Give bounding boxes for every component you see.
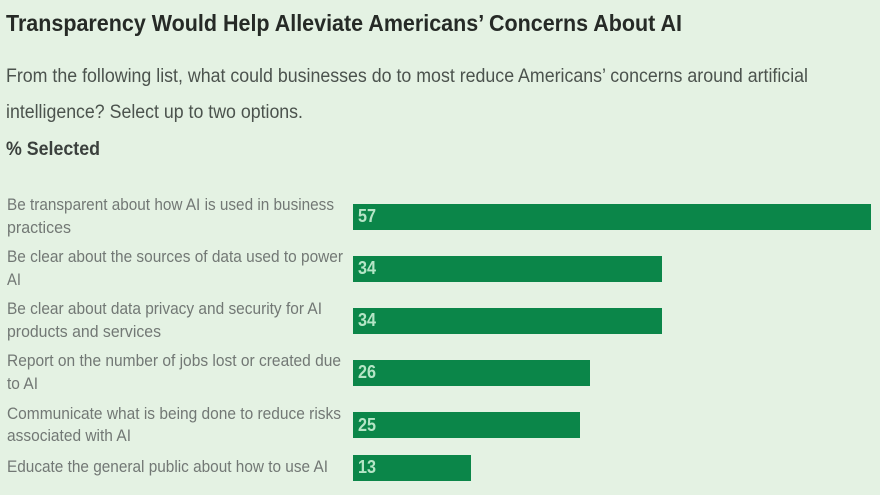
unit label: % Selected — [6, 139, 100, 160]
question text: From the following list, what could businesses do to most reduce Americans’ concerns around artificial — [6, 66, 808, 87]
row: educate public — [7, 455, 471, 481]
row: sources of data: Be clear about the sources of data used to power — [7, 247, 343, 266]
row: jobs lost or created: Report on the number of jobs lost or created due — [7, 351, 341, 370]
row: reduce risks: associated with AI — [7, 426, 131, 445]
row: sources of data — [7, 247, 662, 289]
question text: intelligence? Select up to two options. — [6, 102, 303, 123]
row: jobs lost or created — [7, 351, 590, 393]
row: privacy and security: Be clear about data privacy and security for AI — [7, 299, 322, 318]
row: reduce risks — [7, 404, 580, 445]
row: reduce risks: Communicate what is being done to reduce risks — [7, 404, 341, 423]
row: be transparent — [7, 195, 871, 237]
row: privacy and security: 34 — [358, 310, 376, 330]
bar chart — [7, 195, 871, 481]
row: jobs lost or created: to AI — [7, 374, 38, 393]
row: privacy and security — [7, 299, 662, 341]
row: educate public: Educate the general public about how to use AI — [7, 457, 328, 476]
row: be transparent: Be transparent about how AI is used in business — [7, 195, 334, 214]
row: be transparent: 57 — [358, 206, 376, 226]
question text — [6, 66, 808, 123]
row: privacy and security: products and services — [7, 322, 161, 341]
row: sources of data: 34 — [358, 258, 376, 278]
row: sources of data: AI — [7, 270, 21, 289]
title: Transparency Would Help Alleviate Americans’ Concerns About AI — [6, 10, 682, 36]
row: reduce risks: 25 — [358, 415, 376, 435]
row: educate public: 13 — [358, 457, 376, 477]
row: be transparent: practices — [7, 218, 71, 237]
row: jobs lost or created: 26 — [358, 362, 376, 382]
